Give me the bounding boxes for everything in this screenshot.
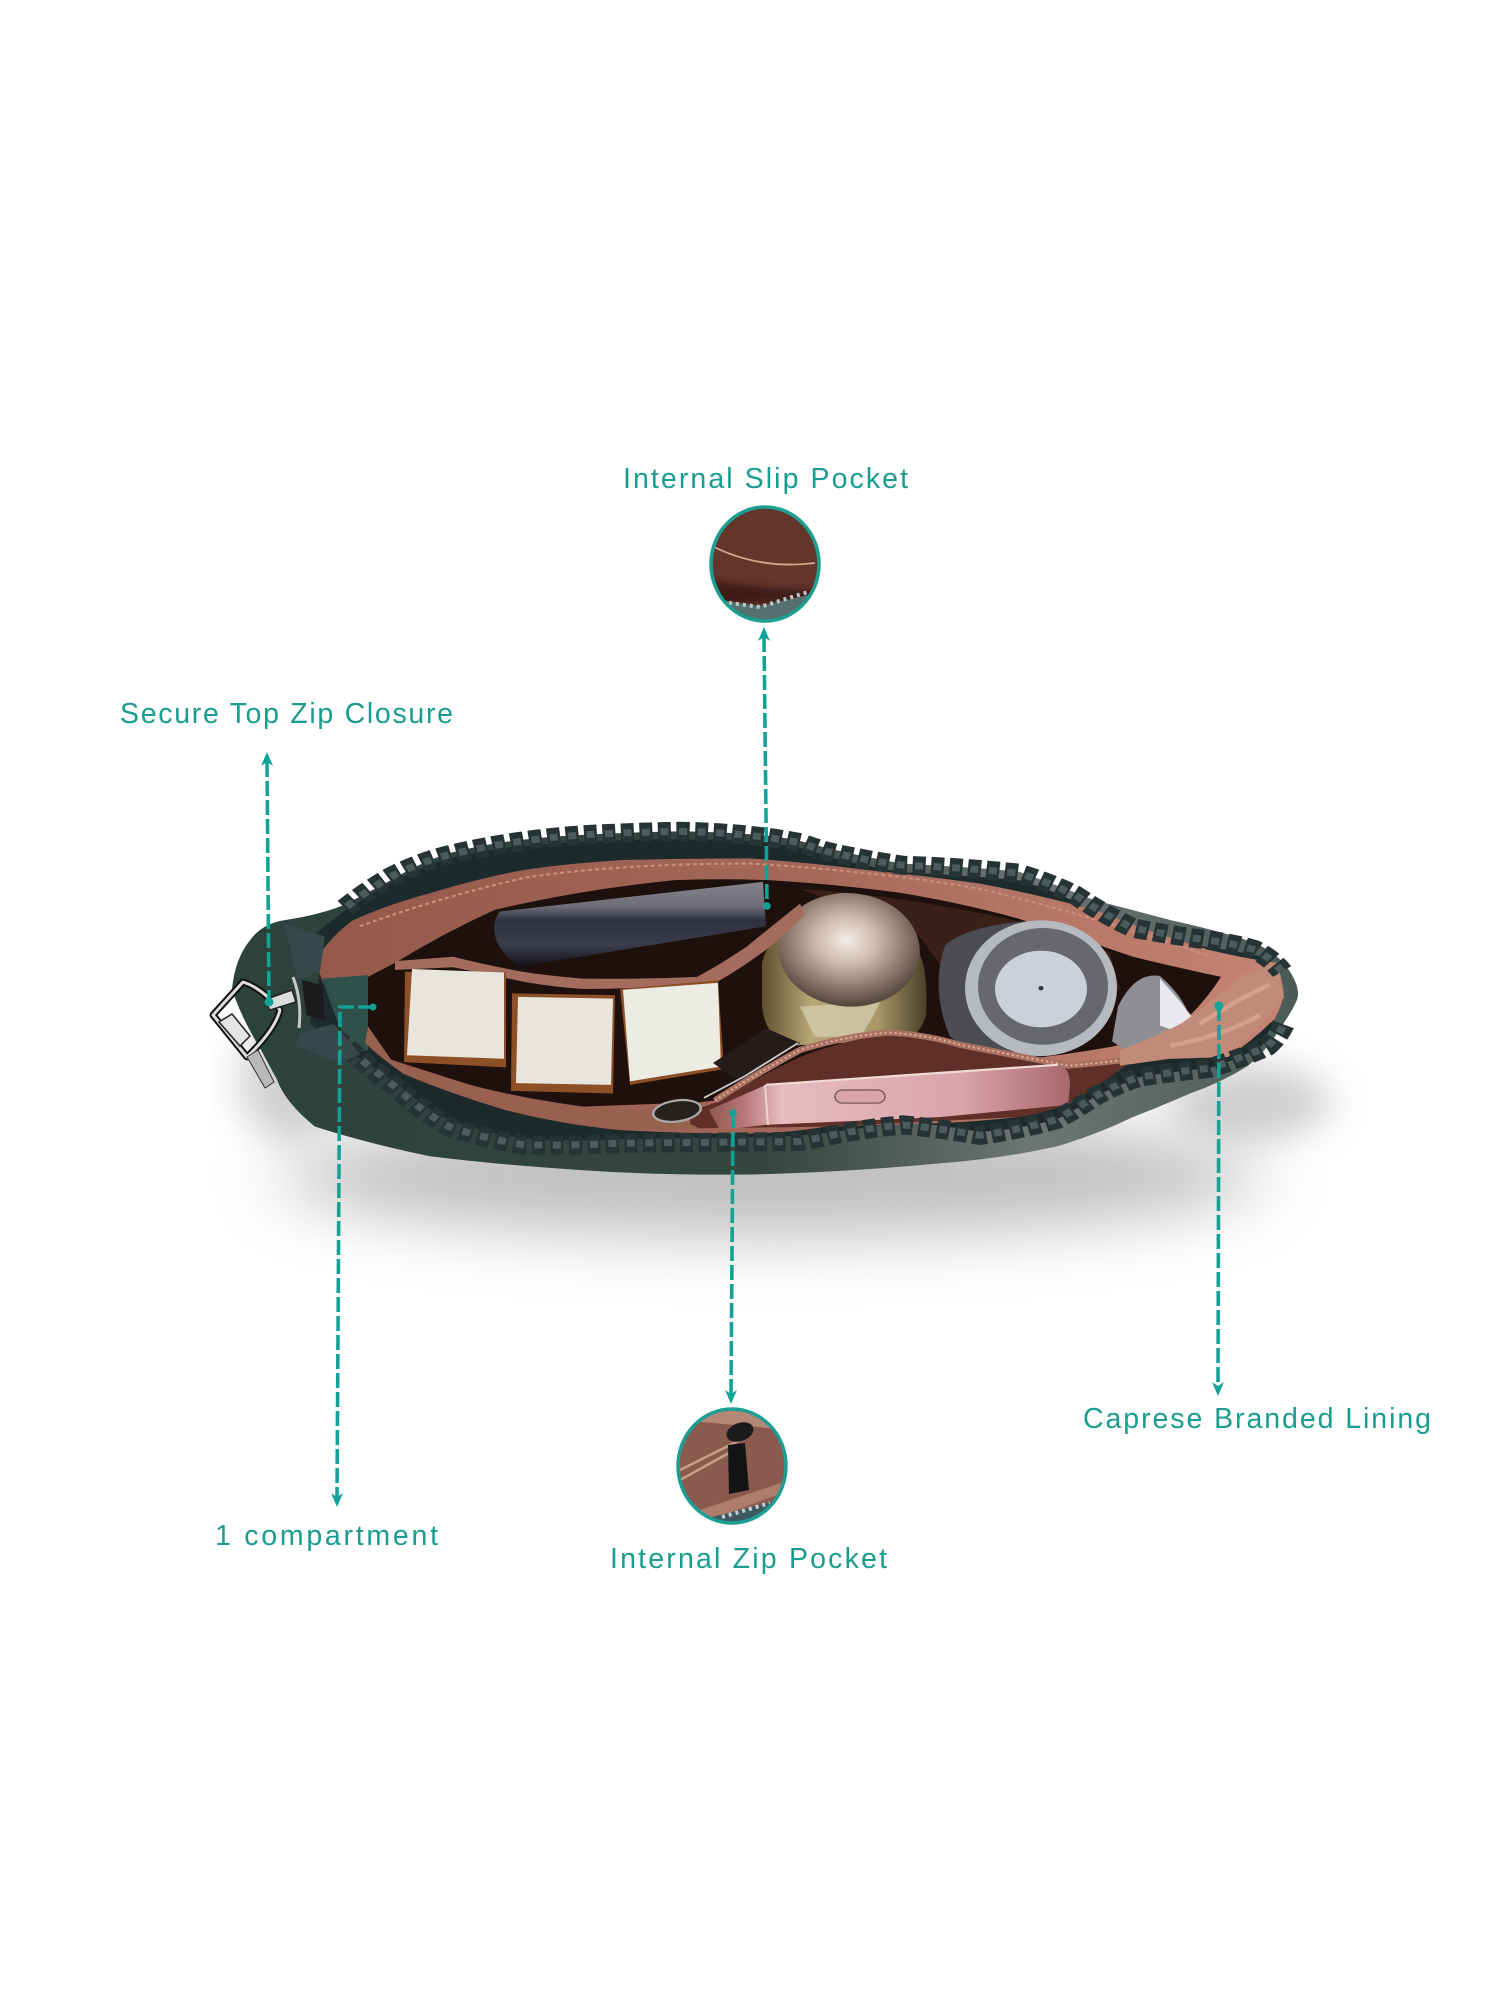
zip pocket seam bbox=[715, 1033, 1215, 1101]
label: internal zip pocket: Internal Zip Pocket bbox=[610, 1543, 887, 1575]
internal zip pocket bbox=[690, 1034, 1228, 1128]
silver pill case bbox=[494, 882, 766, 966]
label: caprese branded lining: Caprese Branded Lining bbox=[1083, 1403, 1431, 1435]
zipper tape bbox=[300, 839, 1284, 1140]
arrow: zip pocket leader bbox=[725, 1109, 737, 1404]
leather body bbox=[232, 831, 1298, 1175]
arrow: compartment leader bbox=[331, 1004, 376, 1507]
zipper teeth highlight top bbox=[345, 831, 1282, 972]
arrow: slip pocket leader bbox=[758, 627, 771, 910]
gold lipstick cube 2 bbox=[511, 993, 615, 1094]
lining fold shade bbox=[1170, 985, 1270, 1046]
detail circle: zip pocket bbox=[676, 1407, 788, 1525]
callout: secure top zip closure bbox=[120, 698, 453, 1006]
bag product illustration bbox=[213, 831, 1330, 1237]
silver buckle and ring bbox=[213, 977, 325, 1088]
bag interior and body bbox=[232, 831, 1330, 1237]
callout: internal slip pocket bbox=[623, 463, 908, 910]
inner cavity bbox=[368, 879, 1221, 1107]
lining bbox=[315, 858, 1284, 1134]
white tube bbox=[1112, 975, 1190, 1050]
round jar bbox=[939, 920, 1117, 1056]
bag drop shadow bbox=[240, 1020, 1330, 1237]
gold lipstick cube 1 bbox=[404, 969, 506, 1067]
lining fold at right bbox=[1120, 963, 1284, 1066]
pocket flap bbox=[395, 904, 805, 989]
green inner patch bbox=[322, 975, 368, 1054]
zipper teeth highlight bottom bbox=[334, 1024, 1284, 1145]
gold lipstick cube 3 bbox=[620, 980, 724, 1085]
arrow: branded lining leader bbox=[1212, 1002, 1224, 1396]
arrow: zip closure leader bbox=[261, 752, 274, 1006]
brown upper cavity bbox=[800, 889, 1120, 1006]
callout: internal zip pocket bbox=[610, 1109, 887, 1575]
zipper teeth top bbox=[345, 831, 1282, 972]
callout: one compartment bbox=[215, 1004, 438, 1552]
label: secure top zip closure: Secure Top Zip Closure bbox=[120, 698, 453, 730]
label: one compartment: 1 compartment bbox=[215, 1520, 438, 1552]
perfume bottle bbox=[762, 883, 930, 1046]
zip end tape bbox=[284, 924, 360, 1063]
phone bbox=[709, 1065, 1070, 1130]
lining lower left band bbox=[365, 1026, 700, 1130]
label: internal slip pocket: Internal Slip Pocket bbox=[623, 463, 908, 495]
detail circle: slip pocket bbox=[709, 505, 821, 623]
zipper teeth bottom bbox=[334, 1024, 1284, 1145]
callout: caprese branded lining bbox=[1083, 1002, 1431, 1435]
zipper pull bbox=[651, 1028, 800, 1125]
lining stitching bbox=[360, 864, 1209, 956]
zip pocket chain bbox=[715, 1033, 1171, 1101]
